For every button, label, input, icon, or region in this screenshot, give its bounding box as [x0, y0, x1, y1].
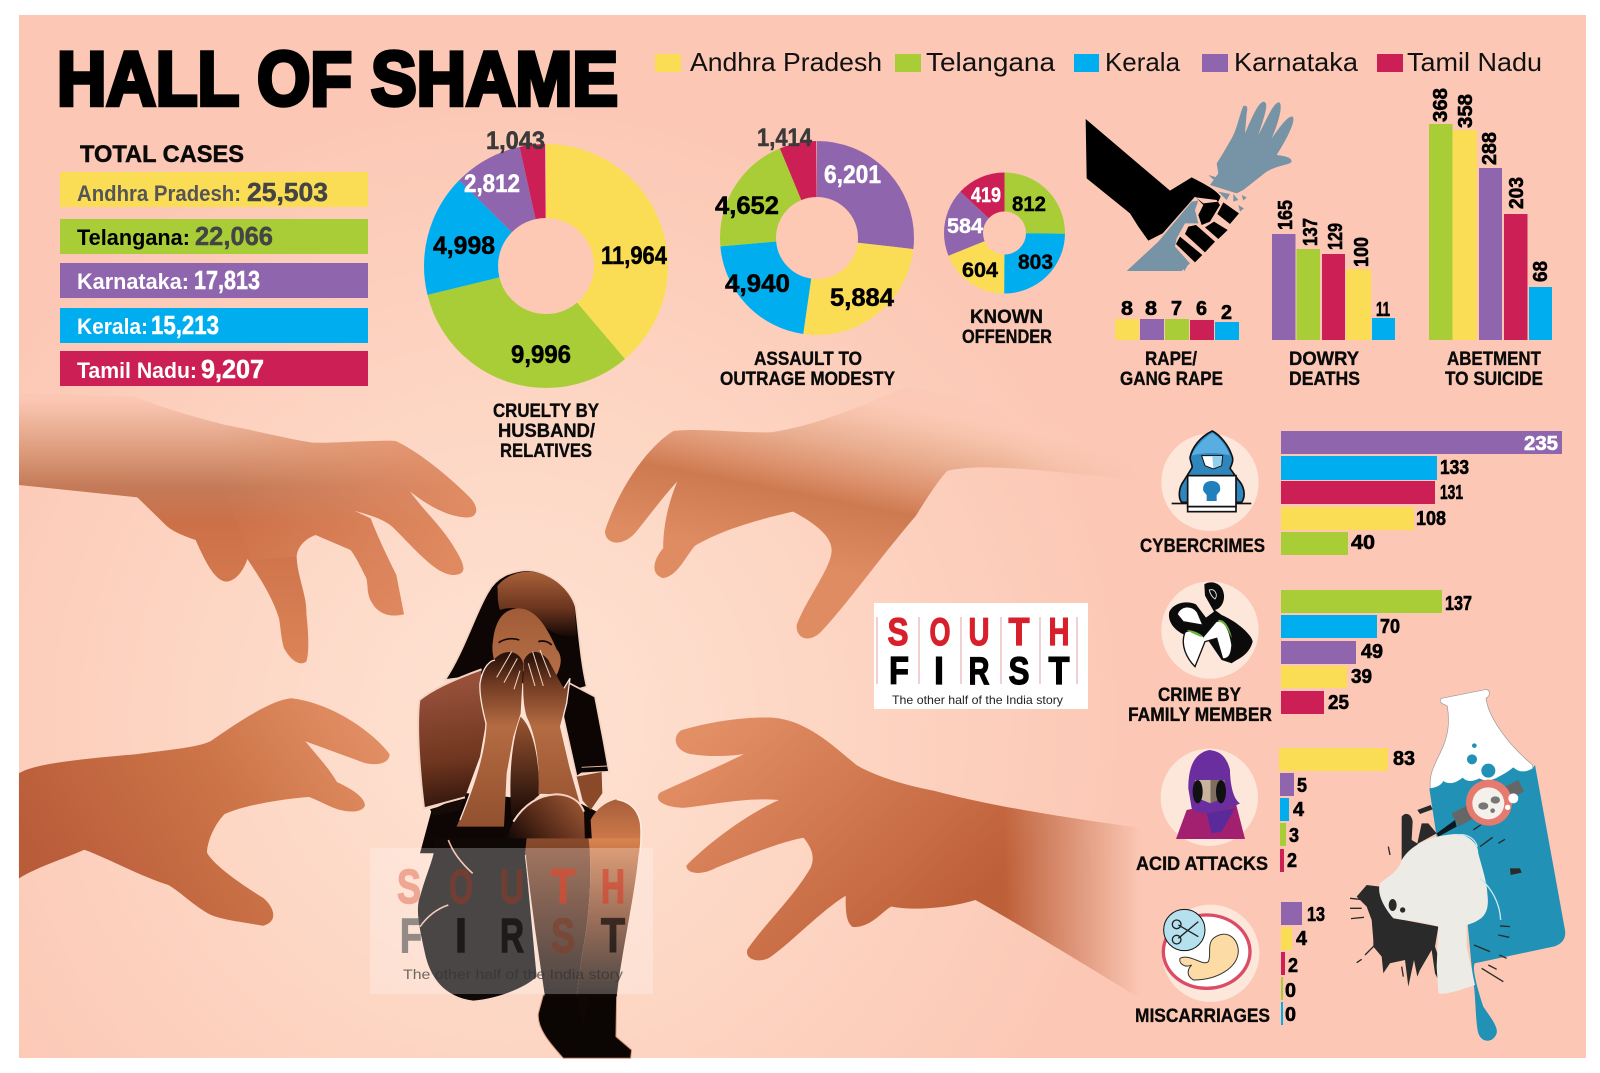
- bar chart: crime by family member: 39: [1351, 666, 1372, 688]
- hair: [445, 570, 587, 693]
- label: abetment to suicide: ABETMENT: [1447, 349, 1541, 370]
- title: HALL OF SHAME: [57, 37, 618, 122]
- legend: Karnataka: [1234, 47, 1359, 77]
- label: rape / gang rape: GANG RAPE: [1120, 369, 1223, 390]
- hair crown: [497, 571, 577, 636]
- hand: top left: [19, 393, 476, 663]
- label: known offender: KNOWN: [970, 307, 1043, 328]
- bar chart: rape / gang rape: [1115, 298, 1239, 340]
- bar chart: cybercrimes: 108: [1416, 508, 1446, 530]
- donut chart: known offender: 812: [1012, 193, 1046, 216]
- lower forearm: [1127, 201, 1198, 271]
- splash strokes: [1350, 825, 1510, 982]
- logo letters: U: [968, 611, 990, 654]
- panel: total cases: 15,213: [151, 310, 219, 340]
- bar chart: rape / gang rape: 7: [1171, 298, 1182, 320]
- bar chart: abetment to suicide: [1429, 88, 1552, 340]
- finger highlights: [497, 650, 551, 689]
- label: cruelty by husband/relatives: CRUELTY BY: [493, 401, 599, 422]
- centre shadow between arms: [510, 717, 539, 818]
- bar chart: crime by family member: 70: [1380, 616, 1400, 638]
- bar chart: crime by family member: FAMILY MEMBER: [1128, 705, 1272, 726]
- bar chart: crime by family member: CRIME BY: [1158, 685, 1241, 706]
- lower splatter: [1357, 885, 1447, 987]
- watermark letters: F: [400, 910, 422, 963]
- head silhouette: [1379, 834, 1488, 994]
- bar chart: crime by family member: 137: [1445, 593, 1472, 615]
- watermark letters: R: [500, 910, 524, 963]
- donut chart: assault to outrage modesty: 4,940: [725, 270, 790, 298]
- right knee: [591, 799, 641, 853]
- panel: total cases: Tamil Nadu:: [77, 358, 197, 383]
- face: [492, 608, 561, 675]
- watermark letters: I: [455, 910, 467, 963]
- bar chart: abetment to suicide: 68: [1530, 261, 1552, 282]
- bar chart: abetment to suicide: 358: [1455, 94, 1477, 128]
- logo letters: S: [1008, 650, 1030, 693]
- bar chart: dowry deaths: 129: [1325, 223, 1347, 250]
- bar chart: acid attacks: 5: [1297, 775, 1307, 797]
- label: rape / gang rape: RAPE/: [1145, 349, 1198, 370]
- woman: upper body: [418, 570, 641, 853]
- torso and left sleeve: [418, 669, 486, 808]
- foot: [538, 995, 632, 1058]
- poison label skull: [1466, 780, 1512, 826]
- bar chart: miscarriages: 0: [1285, 1004, 1296, 1026]
- shirt: [563, 683, 609, 777]
- illustration: reaching hands and crouching woman: [19, 387, 1151, 1058]
- bar chart: acid attacks: [1136, 748, 1415, 875]
- bar chart: miscarriages: 13: [1307, 904, 1325, 926]
- left thigh: [500, 794, 585, 853]
- inner leg: [525, 838, 590, 997]
- panel: total cases: Karnataka:: [77, 269, 189, 294]
- watermark tagline: The other half of the India story: [403, 966, 623, 982]
- bar chart: acid attacks: 2: [1287, 850, 1297, 872]
- panel: total cases: 25,503: [247, 177, 328, 207]
- forearm and open hand: [1210, 102, 1293, 193]
- hand: bottom right: [658, 718, 1151, 1005]
- donut chart: cruelty by husband/relatives: 11,964: [601, 242, 667, 270]
- arm: right of image: [523, 652, 581, 804]
- donut chart: known offender: 604: [962, 259, 998, 282]
- label: cruelty by husband/relatives: [493, 401, 599, 462]
- logo letters: H: [1048, 611, 1070, 654]
- logo letters: T: [1048, 650, 1070, 693]
- label: known offender: OFFENDER: [962, 327, 1052, 348]
- label: abetment to suicide: TO SUICIDE: [1445, 369, 1543, 390]
- logo letters: O: [930, 611, 950, 654]
- logo: South First: [874, 603, 1088, 709]
- bottle white upper: [1430, 689, 1533, 790]
- label: dowry deaths: DEATHS: [1289, 369, 1360, 390]
- logo watermark: [370, 848, 653, 994]
- donut chart: cruelty by husband/relatives: [433, 127, 667, 369]
- thigh highlights: [420, 840, 473, 927]
- bar chart: dowry deaths: 11: [1376, 299, 1390, 321]
- label: rape / gang rape: [1120, 349, 1223, 390]
- bottle liquid and drip: [1429, 765, 1565, 1041]
- logo letters: S: [888, 611, 908, 654]
- bar chart: rape / gang rape: 8: [1121, 298, 1133, 320]
- donut chart: assault to outrage modesty: 4,652: [715, 192, 779, 220]
- arm: left of image: [457, 652, 523, 827]
- label: abetment to suicide: [1445, 349, 1543, 390]
- icon: figure cowering from fist: [1161, 581, 1259, 679]
- bar chart: dowry deaths: [1272, 200, 1395, 340]
- panel: total cases: 17,813: [194, 265, 260, 295]
- donut chart: assault to outrage modesty: 1,414: [757, 124, 812, 152]
- panel: total cases: Andhra Pradesh:: [77, 181, 241, 206]
- legend: [655, 47, 1542, 77]
- bar chart: cybercrimes: 131: [1440, 482, 1463, 504]
- donut chart: assault to outrage modesty: 5,884: [830, 284, 894, 312]
- label: dowry deaths: DOWRY: [1289, 349, 1359, 370]
- donut chart: assault to outrage modesty: 6,201: [824, 161, 881, 189]
- icon: fist gripping forearm: [1086, 102, 1293, 272]
- legend: Kerala: [1105, 47, 1181, 77]
- panel: total cases: 9,207: [201, 354, 264, 384]
- bar chart: abetment to suicide: 203: [1506, 177, 1528, 209]
- wrist shards: [1183, 175, 1247, 272]
- donut chart: known offender: [947, 184, 1053, 282]
- watermark letters: [397, 861, 625, 963]
- panel: total cases: Telangana:: [77, 225, 190, 250]
- donut chart: assault to outrage modesty: [715, 124, 894, 312]
- watermark letters: S: [551, 910, 575, 963]
- bar chart: acid attacks: 3: [1289, 825, 1299, 847]
- hand: top right: [605, 404, 1092, 638]
- label: assault to outrage modesty: ASSAULT TO: [754, 349, 862, 370]
- bar chart: dowry deaths: 137: [1300, 218, 1322, 246]
- watermark letters: T: [601, 910, 625, 963]
- watermark letters: T: [551, 861, 575, 914]
- watermark letters: O: [449, 861, 473, 914]
- icon: veiled woman: [1161, 749, 1258, 846]
- bar chart: miscarriages: 0: [1285, 980, 1296, 1002]
- label: assault to outrage modesty: [720, 349, 895, 390]
- bar chart: dowry deaths: 165: [1275, 200, 1297, 230]
- bar chart: cybercrimes: 40: [1351, 532, 1375, 554]
- bar chart: cybercrimes: 133: [1440, 457, 1469, 479]
- donut chart: cruelty by husband/relatives: 4,998: [433, 232, 495, 260]
- label: dowry deaths: [1289, 349, 1360, 390]
- eyebrows: [499, 639, 552, 645]
- bar chart: acid attacks: ACID ATTACKS: [1136, 854, 1268, 875]
- donut chart: known offender: 803: [1018, 251, 1053, 274]
- icon: foetus and scissors: [1162, 905, 1259, 1002]
- watermark letters: S: [397, 861, 421, 914]
- bar chart: abetment to suicide: 288: [1479, 132, 1501, 165]
- hand: bottom left: [19, 698, 390, 926]
- bar chart: rape / gang rape: 8: [1145, 298, 1157, 320]
- poison label band: [1452, 780, 1524, 827]
- bar chart: rape / gang rape: 6: [1196, 298, 1207, 320]
- watermark letters: H: [601, 861, 625, 914]
- label: known offender: [962, 307, 1052, 348]
- label: cruelty by husband/relatives: HUSBAND/: [498, 421, 596, 442]
- panel: total cases: [60, 141, 368, 386]
- logo letters: F: [889, 650, 909, 693]
- logo letters: [888, 611, 1070, 693]
- black arm and fist: [1086, 119, 1221, 241]
- logo letters: T: [1008, 611, 1030, 654]
- bubbles: [1467, 743, 1495, 778]
- bar chart: miscarriages: MISCARRIAGES: [1135, 1006, 1270, 1027]
- bar chart: cybercrimes: CYBERCRIMES: [1140, 536, 1265, 557]
- bar chart: crime by family member: [1128, 581, 1472, 726]
- bar chart: crime by family member: 49: [1361, 641, 1383, 663]
- bar chart: crime by family member: 25: [1328, 692, 1349, 714]
- donut chart: cruelty by husband/relatives: 2,812: [464, 170, 520, 198]
- upper splatter: [1402, 805, 1437, 863]
- label: cruelty by husband/relatives: RELATIVES: [500, 441, 592, 462]
- logo tagline: The other half of the India story: [892, 693, 1063, 707]
- logo letters: I: [934, 650, 944, 693]
- hair strands: [1457, 835, 1501, 920]
- donut chart: cruelty by husband/relatives: 9,996: [511, 341, 571, 369]
- panel: total cases: 22,066: [195, 221, 273, 251]
- bar chart: miscarriages: 4: [1296, 928, 1308, 950]
- bar chart: miscarriages: 2: [1288, 955, 1298, 977]
- bar chart: dowry deaths: 100: [1351, 237, 1373, 267]
- donut chart: known offender: 419: [971, 184, 1001, 207]
- bar chart: cybercrimes: 235: [1524, 433, 1558, 455]
- bar chart: abetment to suicide: 368: [1430, 88, 1452, 122]
- legend: Telangana: [926, 47, 1056, 77]
- bar chart: rape / gang rape: 2: [1221, 302, 1232, 324]
- icon: acid bottle and splash: [1350, 689, 1565, 1041]
- panel: total cases: Kerala:: [77, 314, 148, 339]
- right upper arm below sleeve: [577, 772, 602, 810]
- outer leg: [577, 838, 640, 1023]
- legend: Tamil Nadu: [1407, 47, 1542, 77]
- label: assault to outrage modesty: OUTRAGE MODESTY: [720, 369, 895, 390]
- dark left thigh: [418, 838, 537, 1001]
- watermark letters: U: [500, 861, 524, 914]
- bar chart: miscarriages: [1135, 902, 1325, 1027]
- logo letters: R: [968, 650, 990, 693]
- icon: hacker: [1161, 431, 1259, 531]
- fist fingers: [1176, 202, 1239, 262]
- donut chart: known offender: 584: [947, 215, 983, 238]
- dark base under torso: [420, 793, 630, 853]
- bar chart: acid attacks: 83: [1393, 748, 1415, 770]
- eye marks: [1389, 868, 1522, 913]
- bar chart: cybercrimes: [1140, 431, 1562, 557]
- woman: lower body: [418, 838, 640, 1058]
- donut chart: cruelty by husband/relatives: 1,043: [486, 127, 545, 155]
- heading: total cases: TOTAL CASES: [80, 141, 244, 168]
- legend: Andhra Pradesh: [690, 47, 882, 77]
- bar chart: acid attacks: 4: [1293, 799, 1305, 821]
